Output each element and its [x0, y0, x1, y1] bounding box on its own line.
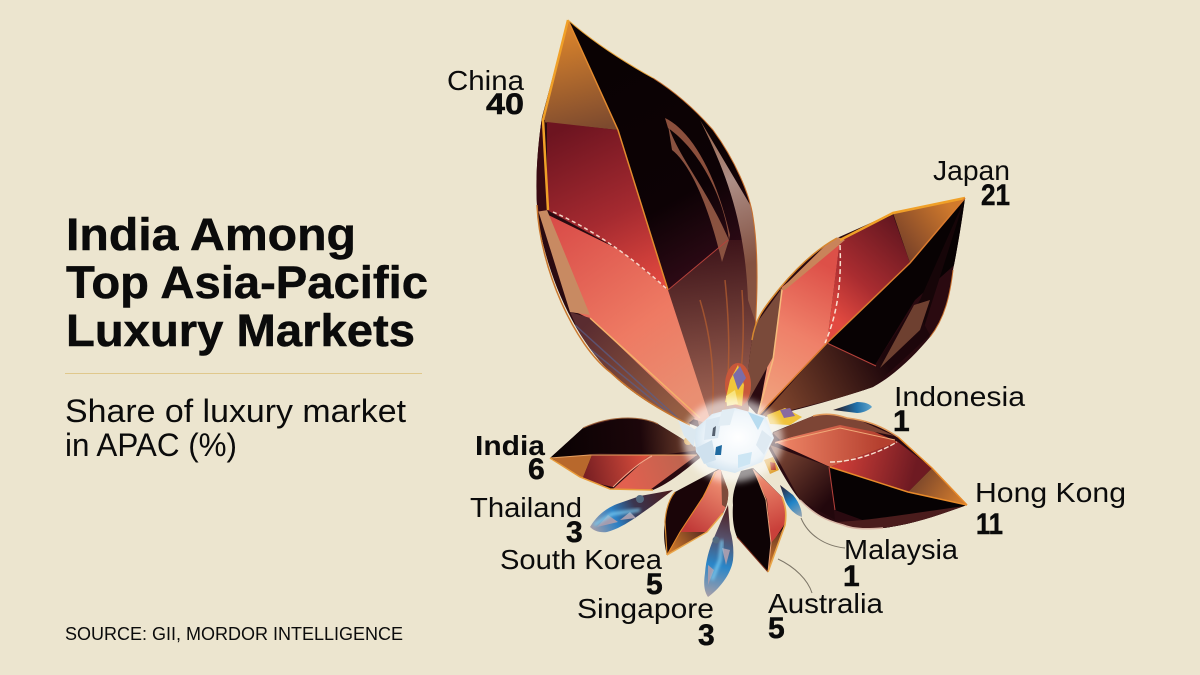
petal: China 40: [536, 20, 758, 427]
petal: Thailand 3: [590, 490, 673, 532]
label: India 6: 6: [528, 453, 545, 486]
petal: India 6: [550, 418, 700, 491]
title: [66, 209, 428, 356]
label: Singapore 3: Singapore: [577, 593, 714, 624]
lotus chart: petals sized by market share: [530, 15, 970, 597]
labels: [447, 65, 1126, 652]
petal: Australia 5: [732, 468, 787, 572]
petal: South Korea 5: [664, 469, 728, 556]
leader line: Malaysia: [801, 518, 845, 548]
label: Australia 5: Australia: [768, 588, 883, 619]
diamond centre: [678, 398, 783, 482]
label: Australia 5: [768, 588, 883, 645]
label: China 40: 40: [486, 88, 524, 121]
label: Hong Kong 11: Hong Kong: [975, 477, 1126, 508]
label: Thailand 3: 3: [566, 516, 583, 549]
label: Japan 21: 21: [981, 179, 1010, 212]
label: Indonesia 1: Indonesia: [894, 381, 1025, 412]
label: Malaysia 1: 1: [843, 560, 860, 593]
label: India 6: India: [475, 430, 545, 461]
label: Indonesia 1: 1: [893, 405, 910, 438]
leader line: Australia: [778, 559, 812, 593]
label: Thailand 3: [470, 492, 583, 549]
label: Malaysia 1: [843, 534, 958, 593]
mosaic: amber stamens: [684, 363, 802, 474]
subtitle: [65, 393, 406, 463]
petal: Hong Kong 11: [765, 410, 970, 535]
label: India 6: [475, 430, 545, 486]
petal: Japan 21: [745, 195, 970, 423]
title: India Among: [66, 209, 356, 260]
label: South Korea 5: [500, 544, 663, 601]
label: Hong Kong 11: 11: [976, 508, 1003, 541]
label: Indonesia 1: [893, 381, 1025, 438]
label: Malaysia 1: Malaysia: [844, 534, 958, 565]
petal: Indonesia 1: [833, 402, 872, 413]
label: Singapore 3: [577, 593, 715, 652]
petal: Malaysia 1: [780, 485, 802, 517]
label: China 40: [447, 65, 524, 121]
title: Luxury Markets: [66, 305, 415, 356]
label: Japan 21: [933, 155, 1010, 212]
label: Thailand 3: Thailand: [470, 492, 582, 523]
label: Hong Kong 11: [975, 477, 1126, 541]
label: South Korea 5: 5: [646, 568, 663, 601]
label: Australia 5: 5: [768, 612, 785, 645]
source note: SOURCE: GII, MORDOR INTELLIGENCE: [65, 624, 403, 644]
subtitle: Share of luxury market: [65, 393, 406, 429]
label: Singapore 3: 3: [698, 619, 715, 652]
title: Top Asia-Pacific: [66, 257, 428, 308]
petal: Singapore 3: [704, 505, 733, 597]
label: South Korea 5: South Korea: [500, 544, 662, 575]
subtitle: in APAC (%): [65, 427, 237, 463]
label: Japan 21: Japan: [933, 155, 1010, 186]
label: China 40: China: [447, 65, 524, 96]
